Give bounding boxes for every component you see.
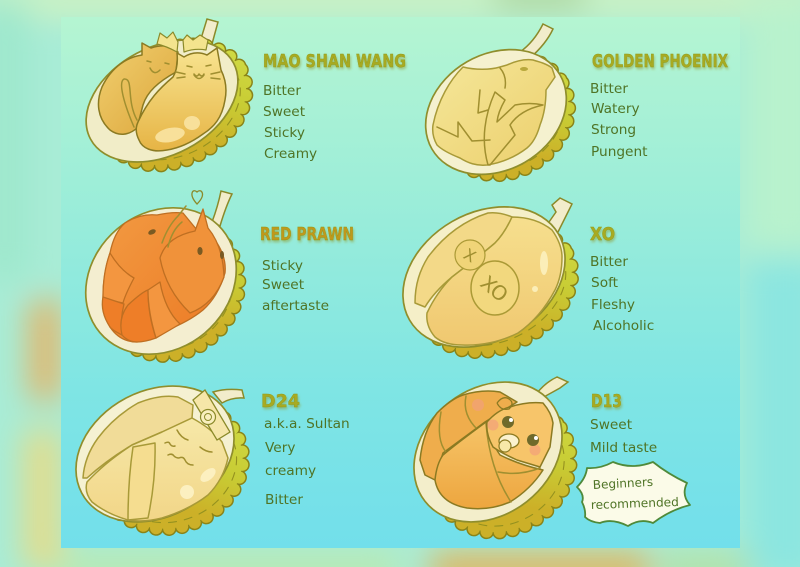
- pacifier: [499, 434, 519, 452]
- label: D24: a.k.a. Sultan: [264, 416, 350, 432]
- sleeping face: [165, 430, 212, 465]
- rind: [82, 382, 262, 550]
- label: D13: Sweet: [590, 417, 633, 433]
- baby cheeks: [488, 420, 540, 456]
- durian: Golden Phoenix: [403, 24, 590, 199]
- label: D24: creamy: [265, 463, 316, 479]
- label: D24: [261, 391, 350, 508]
- crowns: [157, 32, 208, 52]
- flesh lower lobe: [427, 217, 562, 345]
- cat front: [136, 48, 226, 151]
- label: Red Prawn: aftertaste: [262, 298, 329, 314]
- cat back: [98, 43, 178, 134]
- baby face: [487, 403, 553, 467]
- label: Golden Phoenix: Bitter: [590, 81, 628, 97]
- shell: [386, 353, 590, 551]
- label: Mao Shan Wang: Sweet: [263, 104, 306, 120]
- flesh upper lobe: [83, 396, 193, 478]
- label: D24: Very: [265, 440, 295, 456]
- XO circle large: XO: [476, 271, 513, 307]
- X circle small: [455, 240, 485, 270]
- label: Mao Shan Wang: MAO SHAN WANG: [263, 51, 406, 72]
- phoenix eye: [520, 67, 528, 71]
- label: Red Prawn: RED PRAWN: [260, 224, 354, 245]
- shell: [52, 359, 258, 549]
- label: D13: Mild taste: [590, 440, 657, 456]
- label: Mao Shan Wang: Sticky: [264, 125, 305, 141]
- shell: [56, 177, 266, 385]
- baby eyes: [502, 416, 539, 446]
- main panel background: [61, 17, 740, 548]
- callout: beginners recommended: [577, 462, 690, 526]
- XO circle large: [471, 261, 519, 315]
- label: XO: Fleshy: [591, 297, 635, 313]
- label: Red Prawn: [260, 224, 354, 314]
- cat tail: [122, 79, 137, 127]
- label: Mao Shan Wang: [263, 51, 406, 162]
- flesh upper lobe: [415, 213, 512, 307]
- prawn tail segments: [102, 253, 180, 342]
- cat highlights: [154, 116, 200, 145]
- label: Golden Phoenix: Pungent: [591, 144, 648, 160]
- sleeping back head: [497, 398, 512, 409]
- stem: [520, 24, 553, 58]
- label: D24: D24: [261, 391, 300, 412]
- callout: beginners recommended: Beginners: [592, 475, 653, 492]
- stem: [537, 377, 568, 398]
- shell: [403, 25, 589, 199]
- flesh dividers: [439, 396, 478, 452]
- rind: [403, 204, 593, 376]
- label: D13: D13: [591, 391, 622, 412]
- prawn legs: [162, 206, 186, 247]
- prawn eyes: [147, 228, 224, 259]
- label: Red Prawn: Sticky: [262, 258, 303, 274]
- stem: [542, 198, 572, 240]
- durian: D13: [386, 353, 595, 558]
- stem: [200, 19, 218, 44]
- label: Mao Shan Wang: Bitter: [263, 83, 301, 99]
- swaddle lines: [486, 424, 540, 502]
- tag: [193, 390, 230, 440]
- phoenix feathers: [437, 68, 505, 141]
- rind: [420, 35, 590, 197]
- label: Golden Phoenix: GOLDEN PHOENIX: [592, 51, 728, 72]
- baby body: [435, 422, 543, 509]
- label: Golden Phoenix: Watery: [591, 101, 640, 117]
- center band: [128, 443, 155, 520]
- callout: beginners recommended: recommended: [591, 495, 679, 512]
- shell: [65, 15, 259, 187]
- stem: [213, 389, 244, 403]
- shell: [378, 179, 590, 375]
- label: Red Prawn: Sweet: [262, 277, 305, 293]
- rind: [79, 198, 265, 382]
- label: Golden Phoenix: Strong: [591, 122, 636, 138]
- label: D24: Bitter: [265, 492, 303, 508]
- rind: [411, 378, 595, 558]
- durian: Mao Shan Wang: [65, 15, 267, 189]
- label: XO: Soft: [591, 275, 619, 291]
- flesh back: [420, 391, 517, 480]
- label: Golden Phoenix: [590, 51, 728, 160]
- phoenix branch highlight: [484, 92, 543, 165]
- label: XO: XO: [590, 224, 615, 245]
- durian: Red Prawn: [56, 177, 266, 385]
- durian: D24: [52, 359, 262, 550]
- label: Mao Shan Wang: Creamy: [264, 146, 317, 162]
- highlights: [532, 251, 548, 292]
- durian: XO: [378, 179, 593, 376]
- icon: heart: [192, 191, 202, 204]
- flesh: bird body: [433, 60, 555, 165]
- label: XO: Alcoholic: [593, 318, 654, 334]
- prawn head: [160, 209, 224, 313]
- rind: [83, 21, 267, 189]
- stem: [212, 191, 232, 226]
- label: D13: [590, 391, 657, 456]
- flesh lower lobe: [86, 418, 228, 521]
- label: XO: Bitter: [590, 254, 628, 270]
- flesh: prawn body: [103, 213, 225, 342]
- highlights: [180, 465, 218, 499]
- label: XO: [590, 224, 654, 334]
- cat faces: [147, 61, 220, 79]
- X circle small: X: [460, 244, 479, 266]
